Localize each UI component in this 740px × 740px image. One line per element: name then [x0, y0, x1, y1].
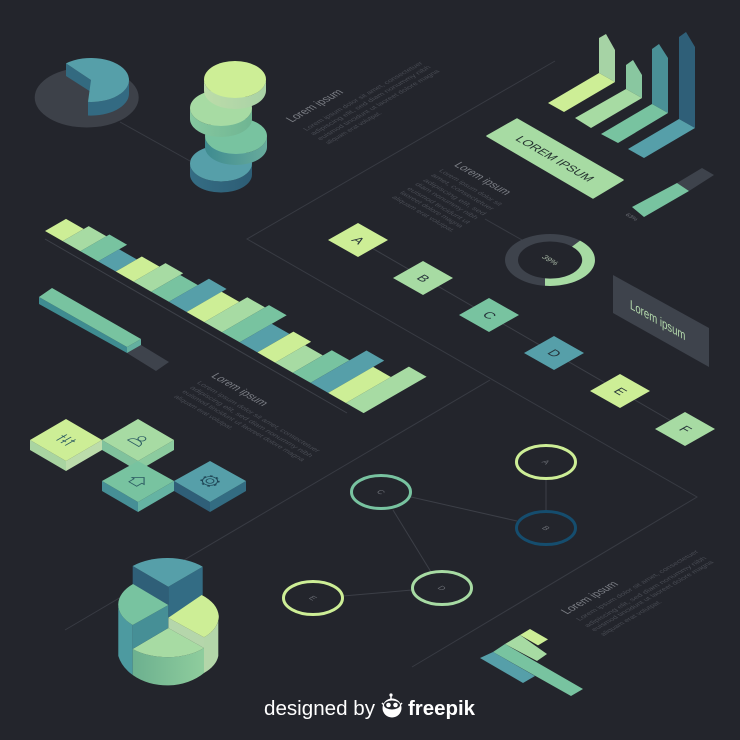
node E [590, 374, 650, 408]
node D [412, 572, 472, 604]
donut chart 39%: 39% [539, 254, 561, 266]
text block: bottom right: adipiscing elit, sed diam nonummy nibh [583, 556, 709, 629]
node A: A [348, 234, 369, 246]
text block: left: Lorem ipsum [208, 371, 272, 408]
text block: middle: euismod tincidunt ut [405, 186, 472, 225]
progress bar 63% [623, 168, 714, 222]
node B [393, 261, 453, 295]
node B: B [413, 272, 434, 284]
progress bar 63%: 63% [623, 213, 639, 222]
node B: B [539, 525, 552, 532]
credit: designed by freepik: freepik [408, 698, 476, 720]
credit: designed by freepik: designed by [264, 698, 375, 720]
four L-shaped bars [548, 32, 695, 158]
text block: top: Lorem ipsum dolor sit amet, consectetuer [302, 61, 426, 132]
tile: sliders [30, 419, 102, 471]
node A: A [539, 459, 552, 466]
text block: top [282, 61, 442, 146]
node F [655, 412, 715, 446]
donut chart 39% [505, 234, 595, 286]
node E: E [306, 595, 319, 602]
node E [284, 582, 342, 614]
text block: top: adipiscing elit, sed diam nonummy nibh [309, 65, 433, 137]
text block: bottom right: euismod tincidunt ut laoreet dolore magna [590, 560, 716, 633]
panel: Lorem ipsum sign: Lorem ipsum [630, 296, 685, 344]
segmented 3D pie chart [118, 558, 219, 685]
small stepped bar chart [480, 629, 583, 696]
node F: F [675, 424, 695, 435]
node D [524, 336, 584, 370]
text block: middle: amet, consectetuer [429, 173, 496, 212]
network graph [284, 446, 576, 614]
node C [352, 476, 410, 508]
text block: bottom right: Lorem ipsum dolor sit amet, consectetuer [575, 549, 701, 622]
text block: top: euismod tincidunt ut laoreet dolore magna [316, 69, 442, 142]
tile: gear [174, 461, 246, 512]
node C [459, 298, 519, 332]
text block: left [172, 371, 322, 463]
node D: D [435, 585, 448, 592]
text block: left: euismod tincidunt ut laoreet dolore magna [180, 389, 306, 463]
node C: C [479, 309, 500, 321]
text block: left: Lorem ipsum dolor sit amet, consectetuer [195, 380, 322, 454]
tile: person [102, 419, 174, 471]
text block: middle: aliquam erat volutpat. [390, 195, 457, 234]
node D: D [544, 347, 565, 359]
stacked cylinders [190, 61, 267, 192]
text block: middle: diam nonummy nibh [413, 182, 480, 221]
text block: bottom right [557, 549, 716, 637]
text block: middle: Lorem ipsum dolor sit [437, 168, 504, 207]
tile: house [102, 461, 174, 512]
text block: left: aliquam erat volutpat. [172, 394, 235, 431]
text block: middle: adipiscing elit, sed [421, 178, 488, 217]
node E: E [610, 385, 631, 397]
text block: middle [390, 160, 515, 234]
text block: bottom right: Lorem ipsum [557, 579, 622, 616]
label: LOREM IPSUM [487, 119, 623, 198]
node B [516, 512, 576, 544]
node A [328, 223, 388, 257]
text block: left: adipiscing elit, sed diam nonummy nibh [188, 385, 314, 459]
text block: top: Lorem ipsum [282, 87, 347, 124]
icon tiles [30, 419, 246, 512]
pie chart on gray ellipse [35, 58, 139, 128]
flow chain A to F [328, 223, 715, 446]
panel: Lorem ipsum sign [613, 275, 709, 367]
node C: C [374, 489, 387, 496]
3D progress bar [39, 288, 169, 371]
node A [516, 446, 576, 478]
text block: top: aliquam erat volutpat. [324, 111, 384, 146]
text block: middle: Lorem ipsum [451, 160, 515, 197]
credit: designed by freepik [264, 693, 476, 720]
text block: bottom right: aliquam erat volutpat. [599, 599, 664, 637]
text block: middle: laoreet dolore magna [398, 190, 465, 229]
icon: freepik robot [382, 693, 402, 718]
label: LOREM IPSUM: LOREM IPSUM [512, 134, 598, 184]
staircase bar chart [45, 219, 427, 413]
